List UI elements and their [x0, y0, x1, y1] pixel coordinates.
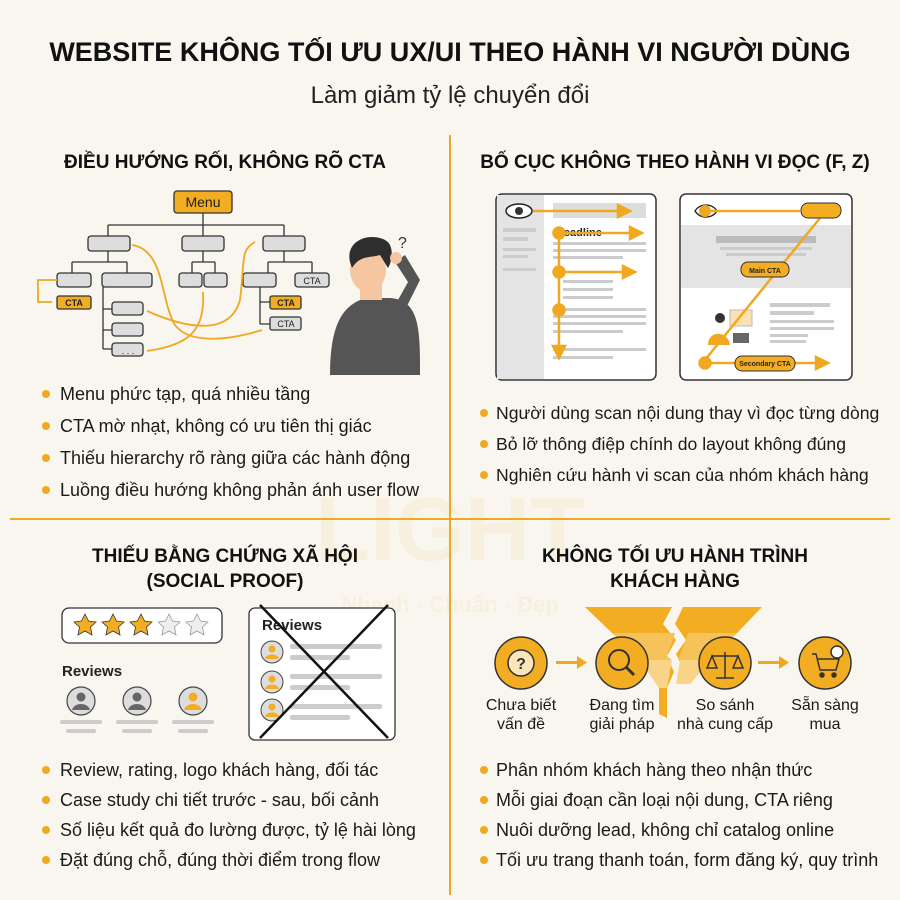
panel: customer journey: ?: [516, 656, 526, 673]
watermark: Nhanh - Chuẩn - Đẹp: [341, 592, 559, 617]
panel: customer journey: [480, 545, 878, 870]
reviews avatars: [60, 663, 214, 733]
stars box: [62, 608, 222, 643]
panel: customer journey: Mỗi giai đoạn cần loại nội dung, CTA riêng: [496, 789, 833, 810]
title: [49, 35, 851, 109]
panel: customer journey: Phân nhóm khách hàng theo nhận thức: [496, 760, 812, 780]
panel: customer journey: vấn đề: [497, 716, 545, 733]
title: Làm giảm tỷ lệ chuyển đổi: [311, 82, 589, 109]
panel: social proof: THIẾU BẰNG CHỨNG XÃ HỘI: [92, 545, 358, 567]
panel: social proof: [42, 545, 416, 870]
bullets: [42, 384, 420, 500]
panel: layout F Z: Người dùng scan nội dung thay vì đọc từng dòng: [496, 403, 879, 423]
panel: customer journey: Đang tìm: [590, 697, 654, 714]
title: WEBSITE KHÔNG TỐI ƯU UX/UI THEO HÀNH VI NGƯỜI DÙNG: [49, 35, 851, 67]
panel: navigation: CTA: [277, 319, 295, 329]
crossed reviews box: Reviews: [262, 617, 322, 634]
panel: customer journey: KHÁCH HÀNG: [610, 570, 740, 592]
stage icons: [495, 637, 851, 689]
panel: customer journey: Nuôi dưỡng lead, không chỉ catalog online: [496, 820, 834, 840]
panel: customer journey: So sánh: [696, 697, 754, 714]
panel: navigation: CTA: [303, 276, 321, 286]
panel: layout F Z: [480, 151, 879, 485]
panel: customer journey: nhà cung cấp: [677, 716, 773, 733]
Z pattern mockup: Main CTA: [749, 268, 781, 275]
watermark: LIGHT: [315, 480, 585, 580]
person icon: ?: [398, 235, 407, 252]
panel: layout F Z: Bỏ lỡ thông điệp chính do layout không đúng: [496, 434, 846, 454]
panel: layout F Z: BỐ CỤC KHÔNG THEO HÀNH VI ĐỌC (F, Z): [480, 151, 870, 173]
sitemap diagram: [57, 191, 329, 356]
bullets: Luồng điều hướng không phản ánh user flow: [60, 480, 420, 500]
panel: navigation: . . .: [122, 346, 134, 356]
panel: social proof: Case study chi tiết trước - sau, bối cảnh: [60, 790, 379, 810]
panel: navigation: CTA: [277, 298, 295, 308]
Z pattern mockup: [680, 194, 852, 380]
bullets: Menu phức tạp, quá nhiều tầng: [60, 384, 310, 404]
panel: customer journey: giải pháp: [590, 716, 655, 733]
panel: navigation: ĐIỀU HƯỚNG RỐI, KHÔNG RÕ CTA: [64, 151, 386, 173]
panel: layout F Z: Nghiên cứu hành vi scan của nhóm khách hàng: [496, 465, 869, 485]
panel: customer journey: Sẵn sàng: [791, 695, 859, 714]
panel: navigation: [38, 151, 420, 500]
panel: social proof: (SOCIAL PROOF): [147, 571, 303, 592]
panel: social proof: Số liệu kết quả đo lường được, tỷ lệ hài lòng: [60, 820, 416, 840]
panel: navigation: CTA: [65, 298, 83, 308]
Z pattern mockup: Secondary CTA: [739, 361, 791, 368]
panel: social proof: Đặt đúng chỗ, đúng thời điểm trong flow: [60, 849, 381, 870]
person icon: [330, 235, 420, 375]
panel: social proof: Review, rating, logo khách hàng, đối tác: [60, 760, 378, 780]
reviews avatars: Reviews: [62, 663, 122, 680]
F pattern mockup: Headline: [556, 227, 602, 239]
F pattern mockup: [496, 194, 656, 380]
panel: navigation: Menu: [185, 194, 221, 210]
bullets: Thiếu hierarchy rõ ràng giữa các hành động: [60, 448, 410, 468]
panel: customer journey: KHÔNG TỐI ƯU HÀNH TRÌNH: [542, 545, 808, 567]
panel: customer journey: Chưa biết: [486, 697, 557, 714]
panel: customer journey: mua: [809, 716, 841, 733]
bullets: CTA mờ nhạt, không có ưu tiên thị giác: [60, 416, 372, 436]
crossed reviews box: [249, 605, 395, 740]
panel: customer journey: Tối ưu trang thanh toán, form đăng ký, quy trình: [496, 850, 878, 870]
broken funnel: [585, 607, 762, 718]
